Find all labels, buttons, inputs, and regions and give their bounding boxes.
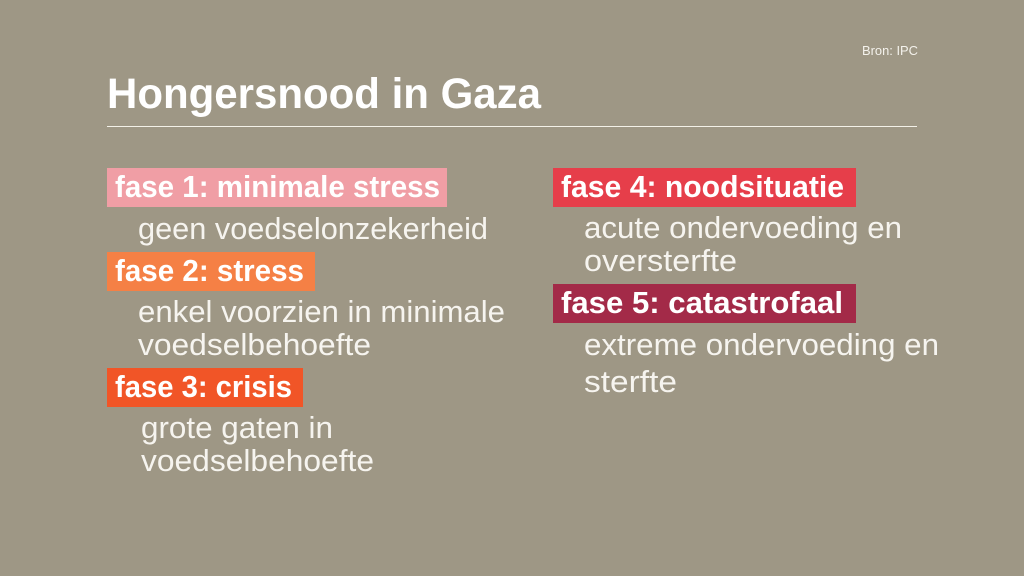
badge: fase 1	[107, 168, 447, 207]
description: fase 4: acute ondervoeding en	[584, 210, 902, 245]
badge: fase 5	[553, 284, 856, 323]
badge: fase 2	[107, 252, 315, 291]
description: fase 4	[584, 210, 902, 278]
description: fase 3: grote gaten in	[141, 410, 333, 445]
description: fase 2	[138, 294, 505, 362]
heading: fase 5: fase 5: catastrofaal	[561, 285, 843, 320]
panel: fase 1	[107, 168, 488, 246]
description: fase 5: extreme ondervoeding en	[584, 327, 939, 362]
description: fase 1: geen voedselonzekerheid	[138, 211, 488, 246]
heading: fase 1: fase 1: minimale stress	[115, 169, 440, 204]
description: fase 5	[584, 327, 939, 399]
title: Hongersnood in Gaza	[107, 71, 541, 118]
description: fase 5: sterfte	[584, 364, 677, 399]
description: fase 3	[141, 410, 374, 478]
panel: fase 2	[107, 252, 505, 362]
heading: fase 2: fase 2: stress	[115, 253, 304, 288]
badge: fase 4	[553, 168, 856, 207]
description: fase 2: voedselbehoefte	[138, 327, 371, 362]
description: fase 4: oversterfte	[584, 243, 737, 278]
source label: Bron: IPC	[862, 43, 918, 58]
heading: fase 4: fase 4: noodsituatie	[561, 169, 844, 204]
panel: fase 4	[553, 168, 902, 278]
panel: fase 3	[107, 368, 374, 478]
description: fase 3: voedselbehoefte	[141, 443, 374, 478]
description: fase 2: enkel voorzien in minimale	[138, 294, 505, 329]
panel: fase 5	[553, 284, 939, 399]
heading: fase 3: fase 3: crisis	[115, 369, 292, 404]
badge: fase 3	[107, 368, 303, 407]
